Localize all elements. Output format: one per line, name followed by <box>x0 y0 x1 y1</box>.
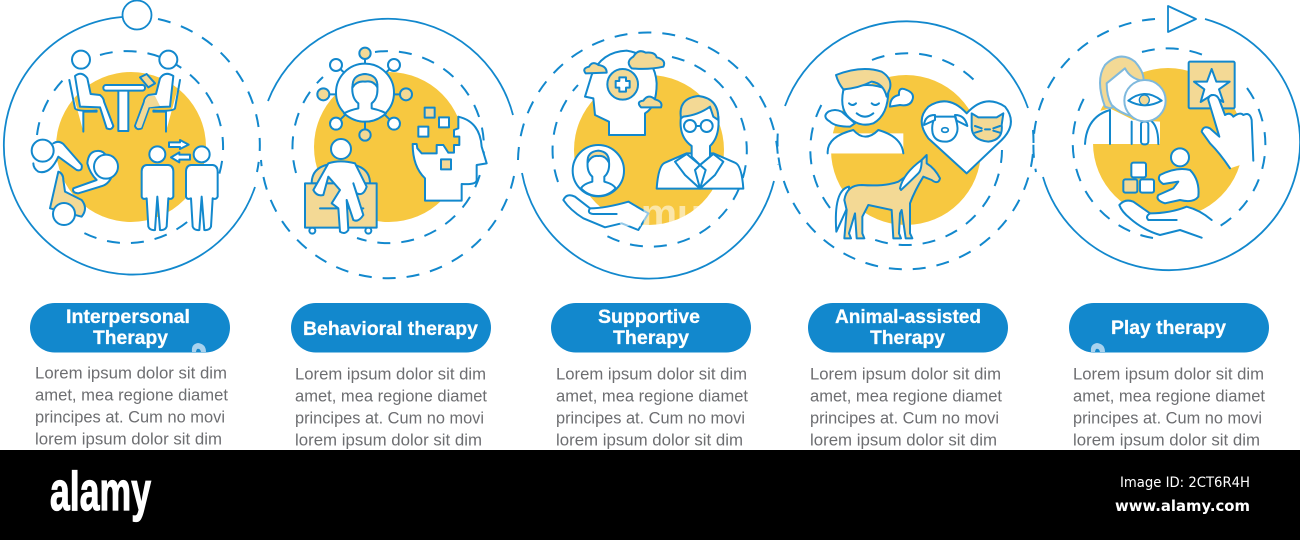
text block: Play: lorem ipsum dolor sit dim <box>1073 430 1260 450</box>
label pill: Animal-assisted Therapy: Animal-assisted <box>835 306 981 328</box>
footer bar <box>0 450 1300 540</box>
panel: animal-assisted therapy <box>778 21 1034 269</box>
outer ring <box>261 19 514 278</box>
icon: woman with magnifying glass <box>1085 57 1166 144</box>
outer ring <box>1033 19 1300 270</box>
text block: Supportive: Lorem ipsum dolor sit dim <box>556 364 747 384</box>
icon: head with medical cross and clouds <box>584 51 664 135</box>
text block: Animal-assisted: principes at. Cum no movi <box>810 408 999 428</box>
label pill: Behavioral therapy <box>291 303 491 352</box>
icon: group of three people lying in a circle <box>32 140 118 225</box>
yellow disc <box>574 75 724 225</box>
text block: Animal-assisted: lorem ipsum dolor sit dim <box>810 430 997 450</box>
text block: Play <box>1073 364 1265 450</box>
icon: smiling boy with clouds <box>825 69 913 153</box>
outer ring <box>778 21 1034 269</box>
text block: Interpersonal: Lorem ipsum dolor sit dim <box>35 364 227 382</box>
text block: Animal-assisted <box>810 364 1002 450</box>
inner dashed ring <box>810 53 1002 245</box>
yellow disc <box>56 72 206 222</box>
icon: heart with dog and cat <box>922 101 1011 173</box>
step marker triangle <box>1168 6 1196 32</box>
panel: behavioral therapy <box>261 19 514 278</box>
text block: Interpersonal: amet, mea regione diamet <box>35 386 228 404</box>
text block: Supportive: principes at. Cum no movi <box>556 408 745 428</box>
text block: Behavioral: amet, mea regione diamet <box>295 386 487 406</box>
text block: Supportive <box>556 364 748 450</box>
website: www.alamy.com <box>1115 497 1250 515</box>
text block: Behavioral <box>295 364 487 450</box>
icon: person in armchair <box>305 139 377 234</box>
icon: doctor with glasses <box>657 96 743 189</box>
text block: Interpersonal <box>35 364 228 448</box>
label pill: Animal-assisted Therapy: Therapy <box>870 327 945 349</box>
step marker circle <box>122 0 152 30</box>
text block: Play: principes at. Cum no movi <box>1073 408 1262 428</box>
label pill: Interpersonal Therapy <box>30 303 230 352</box>
icon: head with puzzle pieces <box>413 108 487 201</box>
label pill: Supportive Therapy: Supportive <box>598 306 700 328</box>
text block: Supportive: lorem ipsum dolor sit dim <box>556 430 743 450</box>
icon: patient portrait on open hand <box>563 145 648 230</box>
label pill: Supportive Therapy <box>551 303 751 352</box>
watermark fragment: amu <box>618 193 702 235</box>
yellow disc <box>314 72 464 222</box>
outer ring <box>4 17 260 275</box>
panel: interpersonal therapy <box>4 0 260 275</box>
text block: Animal-assisted: Lorem ipsum dolor sit dim <box>810 364 1001 384</box>
inner dashed ring <box>37 51 223 243</box>
text block: Animal-assisted: amet, mea regione diamet <box>810 386 1002 406</box>
icon: child with blocks on open hand <box>1119 148 1212 238</box>
panel: supportive therapy <box>518 32 778 279</box>
label pill: Animal-assisted Therapy <box>808 303 1008 352</box>
panel: play therapy <box>1033 6 1300 270</box>
icon: person with social network <box>317 48 412 141</box>
label pill: Play therapy <box>1069 303 1269 352</box>
icon: two standing people exchanging arrows <box>142 140 218 230</box>
text block: Interpersonal: principes at. Cum no movi <box>35 408 225 426</box>
icon: two people at a table <box>69 51 180 132</box>
inner dashed ring <box>1073 48 1265 238</box>
text block: Interpersonal: lorem ipsum dolor sit dim <box>35 430 222 448</box>
label pill: Supportive Therapy: Therapy <box>613 327 689 349</box>
text block: Behavioral: Lorem ipsum dolor sit dim <box>295 364 486 384</box>
yellow disc <box>831 75 981 225</box>
inner dashed ring <box>292 51 484 243</box>
inner dashed ring <box>553 57 747 247</box>
label pill: Interpersonal Therapy: Therapy <box>93 327 168 349</box>
label pill: Play therapy: Play therapy <box>1111 317 1226 339</box>
text block: Play: Lorem ipsum dolor sit dim <box>1073 364 1264 384</box>
icon: horse <box>836 155 940 238</box>
alamy logo: alamy <box>50 460 151 522</box>
text block: Play: amet, mea regione diamet <box>1073 386 1265 406</box>
text block: Supportive: amet, mea regione diamet <box>556 386 748 406</box>
text block: Behavioral: principes at. Cum no movi <box>295 408 484 428</box>
outer ring <box>518 32 778 279</box>
text block: Behavioral: lorem ipsum dolor sit dim <box>295 430 482 450</box>
yellow disc <box>1093 68 1243 218</box>
label pill: Behavioral therapy: Behavioral therapy <box>303 318 478 340</box>
icon: star card with pointing hand <box>1189 62 1253 168</box>
label pill: Interpersonal Therapy: Interpersonal <box>66 306 190 328</box>
image id: Image ID: 2CT6R4H <box>1120 475 1250 491</box>
